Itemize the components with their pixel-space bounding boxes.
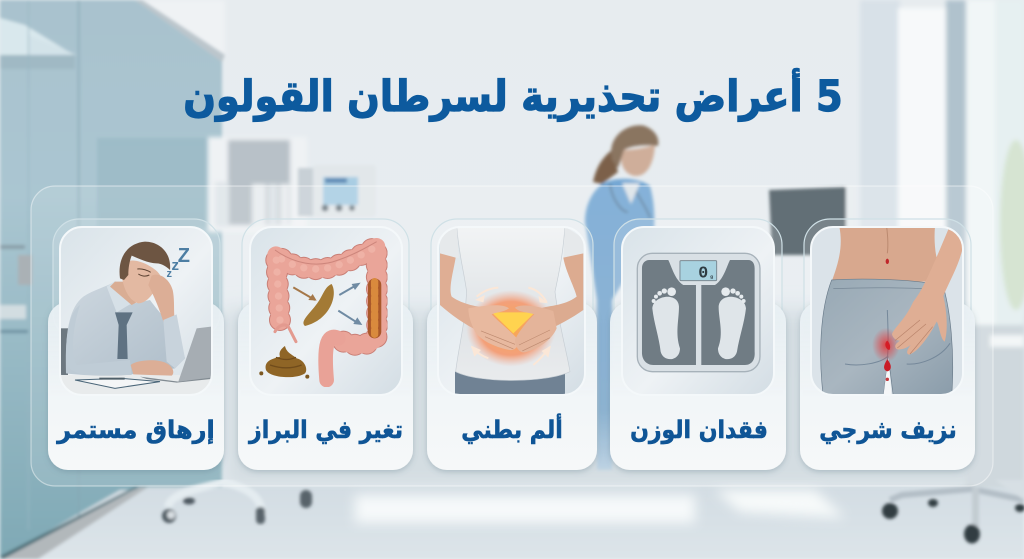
computer screen <box>769 184 852 255</box>
card: abdominal pain <box>427 219 597 470</box>
office chair right <box>882 480 1024 544</box>
label: weight loss: فقدان الوزن <box>630 415 768 444</box>
image: bathroom scale <box>622 227 774 395</box>
label: stool change: تغير في البراز <box>248 415 403 444</box>
icon: sleep z letters: z <box>166 268 172 280</box>
title: 5 أعراض تحذيرية لسرطان القولون <box>183 68 843 122</box>
office chair left <box>162 482 312 524</box>
icon: sleep z letters: Z <box>178 245 190 267</box>
floor light patches <box>355 490 845 523</box>
image: tired man at laptop <box>60 227 215 398</box>
image: colon diagram <box>250 227 402 395</box>
image: person with rectal bleeding <box>811 227 963 397</box>
label: rectal bleeding: نزيف شرجي <box>819 415 957 444</box>
label: abdominal pain: ألم بطني <box>461 413 563 444</box>
image: bathroom scale: g <box>710 274 713 279</box>
label: constant fatigue: إرهاق مستمر <box>55 415 215 444</box>
image: bathroom scale: 0 <box>698 264 708 283</box>
icon: sleep z letters <box>166 248 190 277</box>
shelving cabinet <box>208 137 307 232</box>
card: stool change <box>238 219 413 470</box>
medical monitor on shelf <box>298 165 376 217</box>
image: hands on painful abdomen <box>438 225 585 398</box>
card: rectal bleeding <box>800 219 975 470</box>
outer glass panel <box>31 186 993 486</box>
nurse figure <box>585 125 658 470</box>
card: weight loss <box>610 219 786 470</box>
icon: sleep z letters: z <box>172 257 179 274</box>
card: constant fatigue <box>48 219 224 470</box>
